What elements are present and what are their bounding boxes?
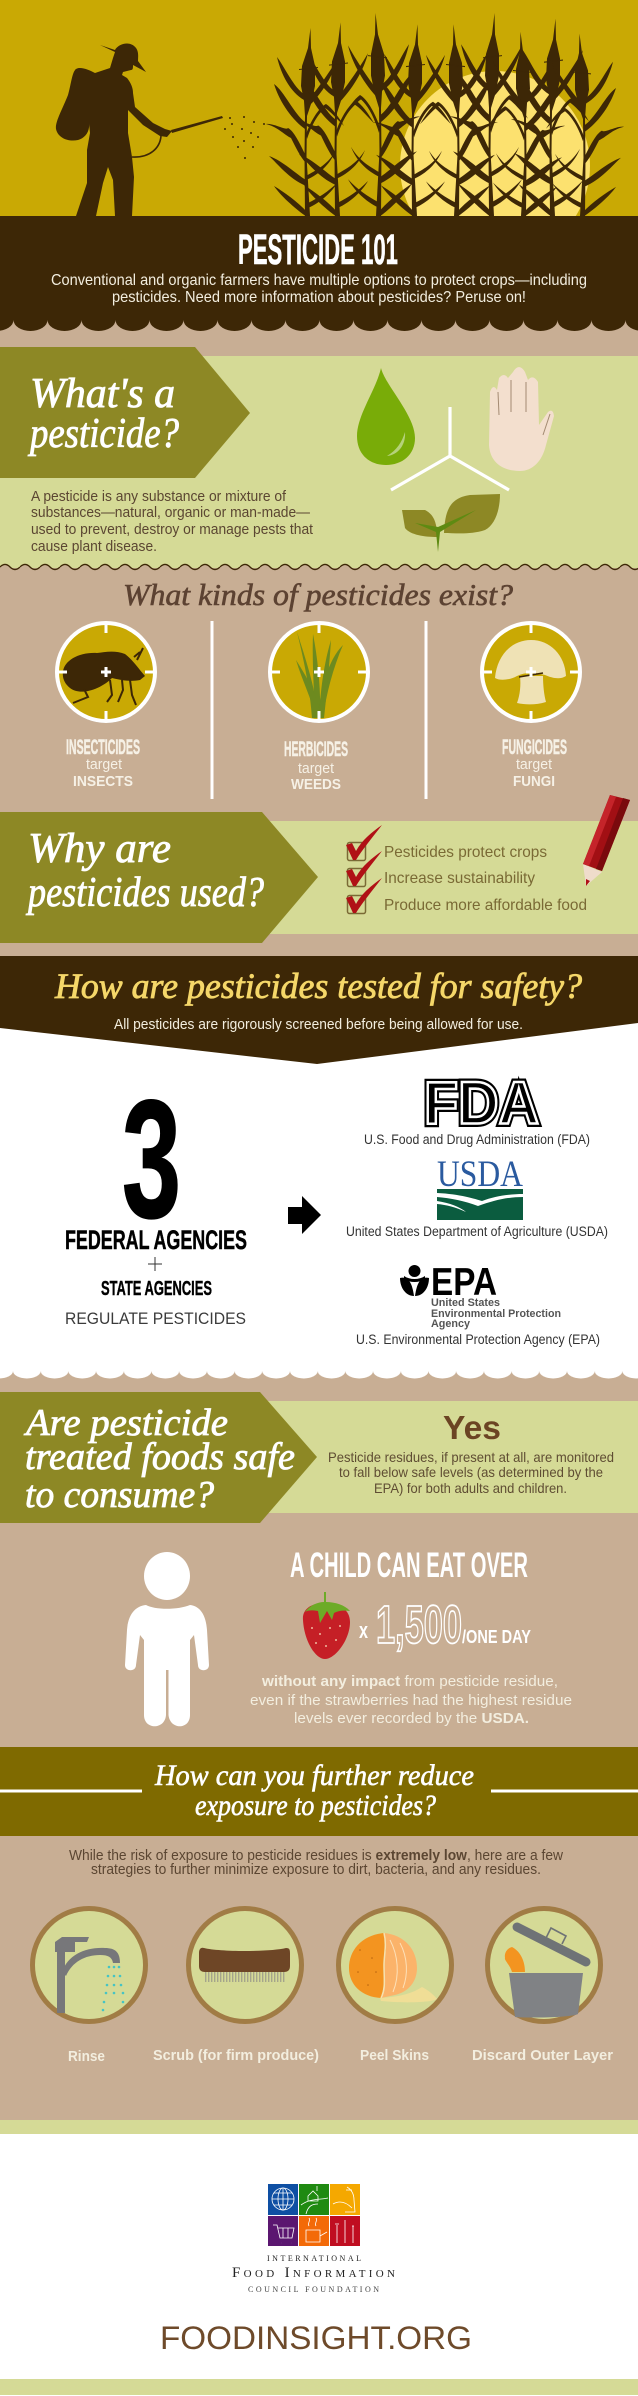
heading arrow: [0, 812, 318, 943]
heading: What's a: [30, 371, 175, 417]
panel: title band: [0, 216, 638, 332]
heading: Are pesticide: [23, 1402, 228, 1444]
panel: how are pesticides tested: [0, 956, 638, 1064]
definition text: used to prevent, destroy or manage pests that: [31, 522, 313, 538]
subheading: All pesticides are rigorously screened before being allowed for use.: [114, 1016, 523, 1033]
label: herbicides: WEEDS: [291, 776, 341, 793]
icon: orange: [349, 1933, 437, 2002]
panel: child can eat: [125, 1546, 572, 1727]
logo: EPA: Agency: [431, 1318, 471, 1330]
panel: what's a pesticide: [0, 347, 638, 568]
intro text: Conventional and organic farmers have multiple options to protect crops—including: [51, 272, 587, 289]
answer text: [328, 1449, 614, 1496]
tip labels: [68, 2047, 613, 2065]
checklist text: Pesticides protect crops: [384, 844, 547, 861]
heading: pesticide?: [27, 411, 179, 457]
answer yes: Yes: [443, 1409, 501, 1446]
panel: are treated foods safe: [0, 1392, 638, 1523]
plus: [148, 1257, 162, 1271]
icon: faucet: [55, 1937, 120, 2013]
definition text: substances—natural, organic or man-made—: [31, 505, 310, 521]
icon: corn stalks: [266, 13, 624, 217]
panel: tan background: [0, 320, 638, 956]
icon: farmer spraying silhouette: [56, 44, 223, 216]
arrow: [288, 1196, 321, 1234]
checklist text: Produce more affordable food: [384, 897, 587, 914]
logo: EPA: [400, 1261, 561, 1330]
label: fungicides: target: [516, 756, 553, 773]
heading: How can you further reduce: [154, 1759, 474, 1792]
heading: treated foods safe: [25, 1436, 295, 1478]
label: fungicides: FUNGICIDES: [502, 736, 567, 759]
logo: EPA: Environmental Protection: [431, 1308, 561, 1320]
regulate pesticides: REGULATE PESTICIDES: [65, 1309, 246, 1328]
logo name: Food Information: [232, 2265, 395, 2281]
logo name: INTERNATIONAL: [267, 2254, 361, 2263]
logo: USDA: [437, 1154, 523, 1220]
checklist: [346, 825, 587, 914]
icon: three-way divider: [391, 407, 509, 490]
tip: scrub: [188, 1908, 302, 2022]
icon: pot: [505, 1927, 586, 2018]
logo: EPA: EPA: [431, 1261, 497, 1304]
tip labels: Peel Skins: [360, 2047, 429, 2064]
panel: why are pesticides used: [0, 795, 638, 943]
icon: EPA flower: [400, 1265, 429, 1296]
icon: leaf sprout: [402, 494, 500, 552]
icon: red pencil: [583, 795, 630, 886]
panel: footer: [160, 2184, 472, 2356]
heading: Why are: [28, 826, 171, 872]
answer text: to fall below safe levels (as determined by the: [339, 1464, 603, 1480]
panel: federal agencies: [65, 1065, 608, 1347]
panel: what kinds of pesticides exist: HERBICIDES: [284, 738, 348, 761]
white scallop divider: [0, 1371, 638, 1380]
panel: reduce exposure tips: [32, 1848, 613, 2065]
icon: sun: [400, 71, 590, 261]
heading: pesticides used?: [25, 870, 264, 916]
caption: FDA: U.S. Food and Drug Administration (FDA): [364, 1132, 590, 1147]
heading: How are pesticides tested for safety?: [54, 966, 582, 1006]
panel: what kinds of pesticides exist: [56, 577, 581, 799]
caption: EPA: U.S. Environmental Protection Agency (EPA): [356, 1332, 600, 1347]
intro text: [69, 1848, 564, 1878]
answer text: EPA) for both adults and children.: [374, 1480, 567, 1496]
panel: tan background lower: [0, 1371, 638, 2120]
label: fungicides: [502, 736, 567, 790]
answer text: Pesticide residues, if present at all, are monitored: [328, 1449, 614, 1465]
icon: grass: [296, 632, 343, 718]
checkbox 3: [346, 878, 382, 914]
impact text: levels ever recorded by the USDA.: [294, 1710, 529, 1727]
impact text: without any impact from pesticide residue,: [261, 1673, 558, 1690]
title: PESTICIDE 101: [238, 226, 398, 274]
heading: to consume?: [25, 1474, 214, 1516]
impact text: [250, 1673, 572, 1727]
tip: peel: [338, 1908, 452, 2022]
definition text: [31, 489, 313, 555]
heading arrow: [0, 1392, 317, 1523]
logo name: [232, 2254, 395, 2294]
target: fungicides: [481, 623, 581, 723]
logo: FDA: FDA: [424, 1070, 539, 1136]
label: herbicides: [284, 738, 348, 793]
icon: water drops: [102, 1966, 124, 2011]
label: insecticides: INSECTS: [73, 773, 133, 790]
heading arrow: [0, 347, 250, 478]
panel: hero illustration: [0, 0, 638, 261]
state agencies: STATE AGENCIES: [101, 1278, 212, 1300]
heading: [154, 1759, 474, 1822]
website: FOODINSIGHT.ORG: [160, 2320, 472, 2356]
panel: reduce exposure heading band: [0, 1747, 638, 1836]
icon: green drop: [357, 368, 415, 465]
checkbox 1: [346, 825, 382, 860]
checklist text: [384, 844, 587, 914]
impact text: even if the strawberries had the highest residue: [250, 1692, 572, 1709]
logo name: COUNCIL FOUNDATION: [248, 2285, 379, 2294]
icon: child: [125, 1552, 209, 1726]
target: insecticides: [56, 623, 156, 723]
label: insecticides: [66, 736, 140, 790]
heading: [27, 371, 179, 457]
number 3: 3: [122, 1065, 181, 1253]
logo: USDA: USDA: [437, 1154, 523, 1195]
logo: EPA: United States: [431, 1297, 500, 1309]
definition text: cause plant disease.: [31, 539, 157, 555]
tip labels: Scrub (for firm produce): [153, 2047, 319, 2064]
intro text: pesticides. Need more information about pesticides? Peruse on!: [112, 289, 526, 306]
tip: rinse: [32, 1908, 146, 2022]
icon: strawberry: [303, 1592, 350, 1659]
icon: hand: [489, 367, 554, 471]
target: herbicides: [269, 623, 369, 723]
tip labels: Rinse: [68, 2048, 105, 2065]
intro text: [51, 272, 587, 306]
per day: /ONE DAY: [462, 1627, 531, 1647]
heading: [23, 1402, 295, 1516]
checklist text: Increase sustainability: [384, 870, 535, 887]
bottom green band: [0, 2379, 638, 2395]
icon: mushroom: [495, 640, 566, 704]
caption: USDA: United States Department of Agriculture (USDA): [346, 1224, 608, 1239]
intro text: While the risk of exposure to pesticide residues is extremely low, here are a few: [69, 1848, 564, 1864]
logo: IFIC squares: [268, 2184, 360, 2246]
heading: [25, 826, 264, 916]
label: insecticides: INSECTICIDES: [66, 736, 140, 759]
heading: exposure to pesticides?: [195, 1789, 436, 1822]
label: herbicides: target: [298, 760, 335, 777]
definition text: A pesticide is any substance or mixture of: [31, 489, 287, 505]
heading: What kinds of pesticides exist?: [123, 577, 514, 612]
icon: brush: [199, 1948, 290, 1977]
federal agencies: FEDERAL AGENCIES: [65, 1225, 247, 1255]
label: fungicides: FUNGI: [513, 773, 555, 790]
wavy divider: [0, 561, 638, 575]
tip labels: Discard Outer Layer: [472, 2047, 613, 2064]
multiplier x: x: [359, 1618, 369, 1643]
icon: spray droplets: [224, 116, 265, 159]
logo: FDA: FDA: [424, 1070, 539, 1136]
green band: [0, 2120, 638, 2134]
dividers: [212, 621, 426, 799]
number 1,500: 1,500: [376, 1595, 462, 1655]
label: insecticides: target: [86, 756, 123, 773]
tip: discard: [488, 1908, 600, 2022]
intro text: strategies to further minimize exposure to dirt, bacteria, and any residues.: [91, 1862, 541, 1878]
icon: bug: [63, 648, 145, 705]
checkbox 2: [346, 851, 382, 886]
